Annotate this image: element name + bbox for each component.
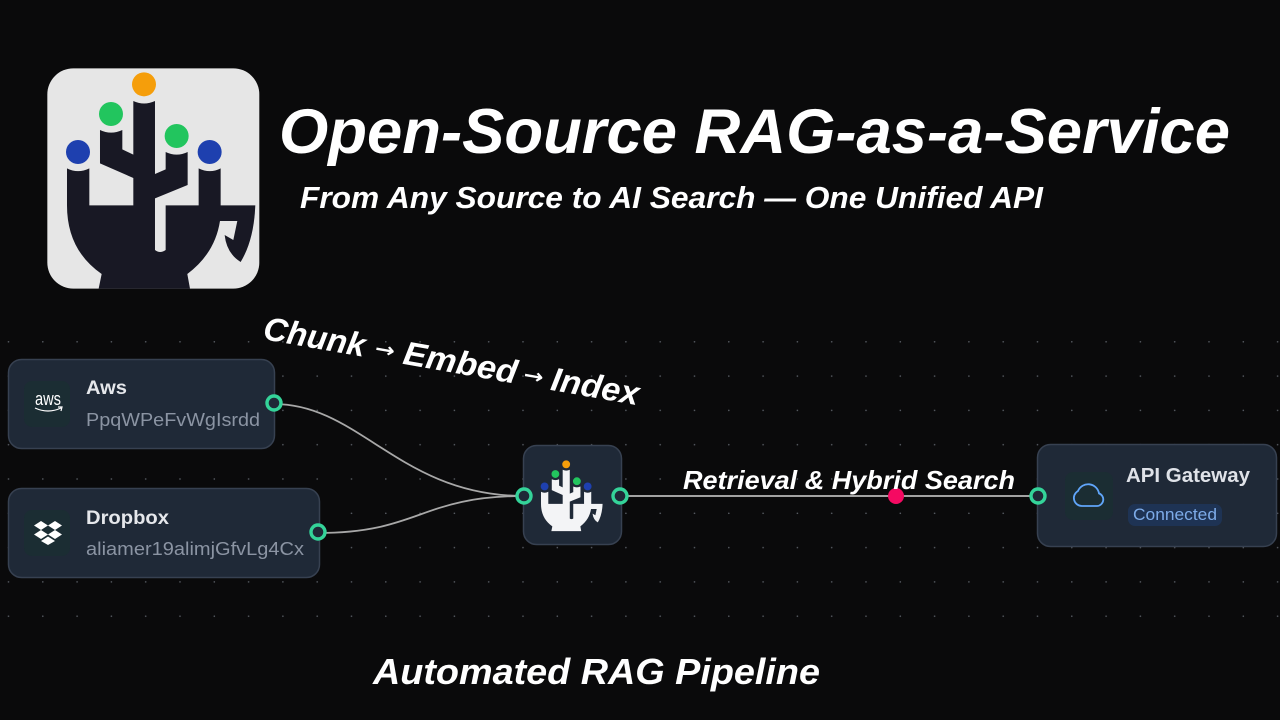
connector ports xyxy=(267,396,1045,539)
moving data point on connector xyxy=(888,488,904,504)
node: Aws source xyxy=(8,360,274,448)
annotation: Chunk, Embed, Index xyxy=(261,309,644,412)
annotation: Retrieval and Hybrid Search: Retrieval & Hybrid Search xyxy=(683,465,1015,495)
label: API Gateway: API Gateway xyxy=(1126,465,1251,487)
caption: Automated RAG Pipeline: Automated RAG Pipeline xyxy=(372,651,820,692)
badge: Connected: Connected xyxy=(1133,505,1217,524)
annotation: Chunk, Embed, Index: Embed xyxy=(401,334,521,391)
node: API Gateway xyxy=(1038,444,1276,546)
node: central RAG engine xyxy=(524,446,622,544)
icon: dropbox logo xyxy=(24,510,70,556)
icon: mini logo xyxy=(541,460,603,531)
label: Dropbox id: aliamer19alimjGfvLg4Cx xyxy=(86,539,304,559)
subtitle: From Any Source to AI Search — One Unified API xyxy=(300,180,1044,215)
label: Dropbox: Dropbox xyxy=(86,508,169,529)
title: Open-Source RAG-as-a-Service xyxy=(279,97,1230,167)
icon: cloud xyxy=(1065,472,1113,520)
annotation: Chunk, Embed, Index: → xyxy=(522,362,546,389)
annotation: Chunk, Embed, Index: → xyxy=(373,336,397,363)
logo: tree hand with coloured nodes xyxy=(47,68,259,289)
label: Aws: Aws xyxy=(86,378,127,399)
annotation: Chunk, Embed, Index: Index xyxy=(548,360,644,412)
node: Dropbox source xyxy=(8,488,320,578)
annotation: Chunk, Embed, Index: Chunk xyxy=(261,309,370,364)
icon: aws logo xyxy=(24,381,70,427)
icon: aws logo: aws xyxy=(35,389,61,409)
label: Aws id: PpqWPeFvWgIsrdd xyxy=(86,410,260,430)
connector lines between nodes xyxy=(274,404,1038,533)
